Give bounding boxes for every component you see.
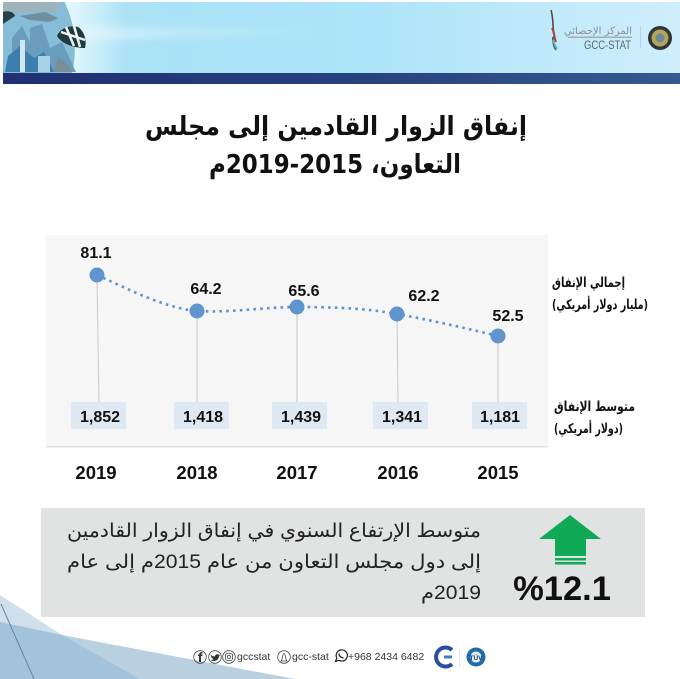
year labels: 2017	[276, 462, 318, 483]
line chart: total spending	[97, 275, 498, 336]
callout panel	[41, 508, 645, 617]
row label: total spending	[552, 275, 648, 313]
header parachute	[57, 26, 86, 48]
callout text: إلى دول مجلس التعاون من عام 2015م إلى عام	[67, 552, 481, 574]
logo: GCC-STAT: المركز الإحصائي	[564, 26, 632, 37]
year labels	[75, 462, 519, 483]
average spending boxes: 1,418	[183, 409, 223, 426]
total spending values: 81.1	[80, 245, 112, 262]
logo: GCC-STAT	[551, 10, 672, 52]
header navy bar	[3, 73, 680, 84]
callout text: متوسط الإرتفاع السنوي في إنفاق الزوار القادمين	[67, 521, 481, 543]
footer contacts	[194, 648, 485, 667]
title: إنفاق الزوار القادمين إلى مجلس	[145, 112, 527, 142]
logo: TUV badge: TÜV	[470, 653, 483, 662]
callout text	[67, 521, 481, 604]
average spending boxes: 1,852	[80, 409, 120, 426]
row label: total spending: إجمالي الإنفاق	[552, 275, 625, 291]
growth value: %12.1	[513, 570, 611, 608]
data points	[90, 268, 506, 344]
callout text: 2019م	[421, 583, 481, 604]
total spending values	[80, 245, 524, 325]
year labels: 2016	[377, 462, 419, 483]
total spending values: 52.5	[492, 308, 524, 325]
icon: green up arrow	[539, 515, 601, 564]
average spending boxes: 1,181	[480, 409, 520, 426]
logo: GCC-STAT: GCC-STAT	[584, 38, 632, 52]
footer decorative triangles	[0, 595, 295, 679]
logo: GCC emblem	[648, 26, 672, 50]
year labels: 2019	[75, 462, 117, 483]
icons: social	[194, 650, 347, 663]
header globe collage	[3, 2, 86, 73]
logo: G mark	[436, 648, 452, 667]
header banner	[0, 0, 680, 84]
average spending boxes: 1,439	[281, 409, 321, 426]
title	[145, 112, 527, 180]
year labels: 2015	[477, 462, 519, 483]
total spending values: 62.2	[408, 288, 440, 305]
chart panel	[46, 235, 548, 448]
year labels: 2018	[176, 462, 218, 483]
footer contacts: gccstat	[237, 651, 270, 663]
title: التعاون، 2015-2019م	[209, 150, 461, 180]
footer contacts: +968 2434 6482	[348, 651, 424, 663]
drop lines	[97, 275, 498, 403]
footer contacts: gcc-stat	[292, 651, 329, 663]
logo: TUV badge	[466, 648, 486, 666]
average spending boxes: 1,341	[382, 409, 422, 426]
row label: average spending: (دولار أمريكي)	[554, 420, 623, 437]
total spending values: 65.6	[288, 283, 320, 300]
average spending boxes	[71, 402, 527, 429]
row label: average spending	[554, 399, 635, 437]
row label: average spending: متوسط الإنفاق	[554, 399, 635, 415]
total spending values: 64.2	[190, 281, 222, 298]
